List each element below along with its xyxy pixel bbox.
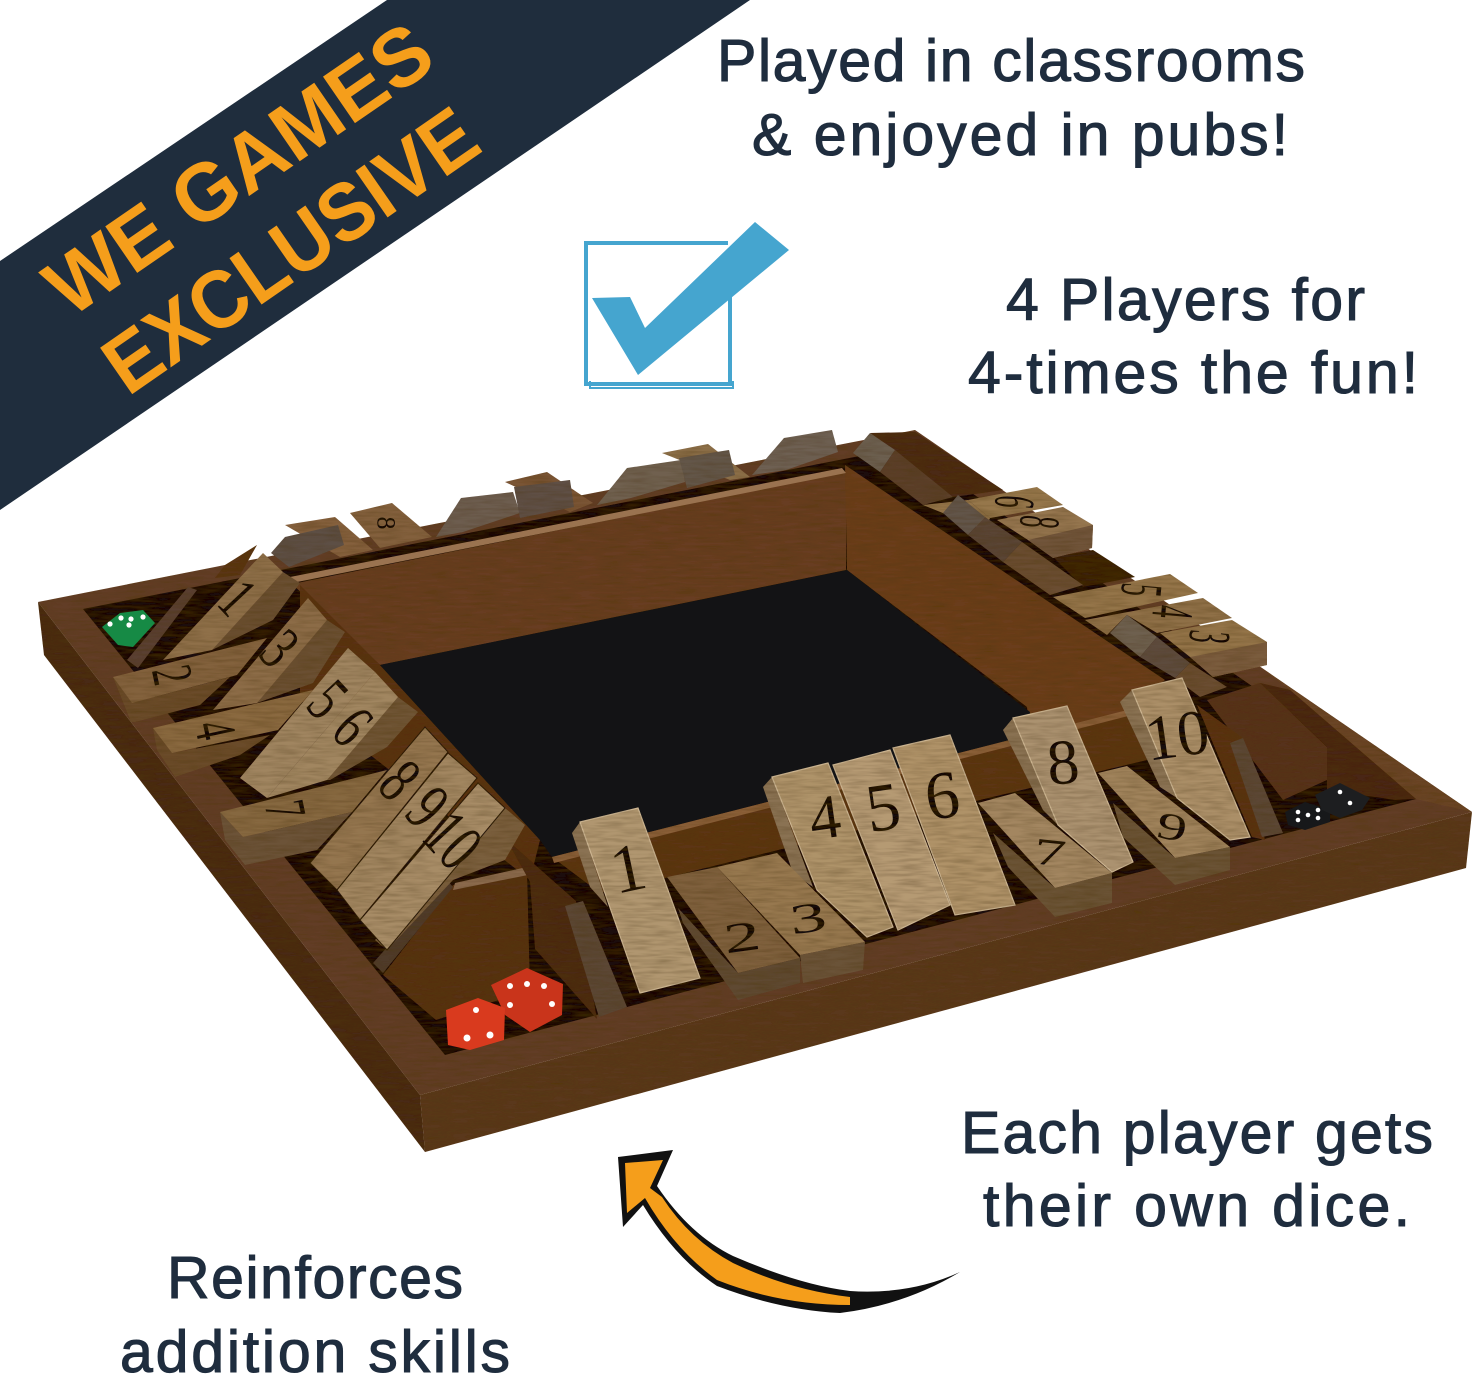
left tile 3: 3: [246, 616, 314, 680]
tray and walls: [38, 430, 1472, 1152]
front tile 3: 3: [787, 893, 829, 943]
game board: wooden shut the box: [38, 430, 1472, 1152]
banner: WE Games Exclusive: EXCLUSIVE: [86, 90, 495, 412]
right row tiles: [853, 432, 1267, 697]
text: played in classrooms: [717, 28, 1305, 168]
text: 4 players: 4-times the fun!: [968, 340, 1418, 406]
front tile 7: [978, 793, 1112, 917]
right row tiles: 4: [1139, 603, 1207, 621]
front tile 4: 4: [805, 782, 845, 854]
board fittings and tiles: [113, 430, 1472, 1020]
left tile 2: 2: [139, 660, 205, 690]
left tile 6: [267, 672, 418, 798]
front tile 9: 9: [1153, 803, 1191, 851]
left tile 10: 10: [409, 796, 497, 884]
left tile 8: [310, 727, 448, 890]
black felt: [380, 570, 1030, 857]
red compartment walls: [383, 840, 597, 1020]
left tile 10: [360, 783, 525, 950]
front tile 6: 6: [920, 755, 964, 835]
front tile 7: 7: [1032, 831, 1068, 875]
dice: red: [446, 968, 563, 1050]
text: 4 players: [968, 267, 1418, 406]
front tile 1: 1: [603, 827, 653, 909]
left tile 3: [213, 598, 345, 710]
front tile 5: 5: [861, 767, 905, 847]
left tile 1: [163, 553, 300, 660]
arrow: curved orange arrow: [618, 1150, 960, 1313]
icon: blue check mark in box: [586, 222, 789, 388]
left tile 1: 1: [205, 567, 269, 629]
front tile 10: 10: [1140, 695, 1214, 775]
right compartment: [1207, 667, 1472, 812]
right row tiles: 3: [1176, 628, 1244, 646]
right row tiles: 6: [982, 493, 1048, 511]
divider flaps: [127, 587, 1283, 1017]
front tile 2: [667, 867, 800, 1000]
left tile 4: [153, 690, 313, 777]
text: reinforces addition skills: [120, 1245, 510, 1378]
front tile 8: [1003, 706, 1133, 872]
front tile 2: 2: [721, 912, 763, 962]
banner: WE Games Exclusive: [0, 0, 750, 510]
back wall top rail highlight: [290, 468, 846, 583]
dice: green: [102, 610, 155, 647]
back row tiles: [271, 430, 838, 567]
text: each player gets dice: Each player gets: [961, 1100, 1433, 1166]
text: played in classrooms: Played in classrooms: [717, 28, 1305, 94]
front tile 4: [763, 763, 893, 937]
text: each player gets dice: [961, 1100, 1433, 1239]
front tile 1: [572, 808, 700, 993]
left tile 5: 5: [293, 667, 361, 733]
left tile 6: 6: [318, 694, 386, 760]
text: each player gets dice: their own dice.: [983, 1173, 1410, 1239]
left tile 9: [337, 753, 477, 920]
front rail: [552, 708, 1147, 893]
text: played in classrooms: & enjoyed in pubs!: [752, 102, 1288, 168]
text: reinforces addition skills: Reinforces: [167, 1245, 463, 1311]
back row tiles: 8: [372, 516, 400, 530]
left tile 2: [113, 638, 267, 722]
front tile 8: 8: [1044, 725, 1082, 799]
right row tiles: 8: [1007, 513, 1073, 531]
text: 4 players: 4 Players for: [1006, 267, 1365, 333]
banner: WE Games Exclusive: WE GAMES: [29, 5, 449, 334]
left tile 5: [240, 648, 375, 798]
left tile 7: 7: [252, 795, 318, 825]
front tile 9: [1098, 766, 1230, 885]
dice: black: [1285, 783, 1370, 830]
front tile 5: [833, 750, 950, 930]
left tile 9: 9: [392, 772, 464, 842]
left tile 7: [220, 770, 387, 865]
right row tiles: 5: [1108, 581, 1176, 599]
front tile 3: [717, 853, 865, 983]
front tile 10: [1120, 678, 1250, 840]
left tile 4: 4: [182, 715, 248, 745]
front tile 6: [893, 735, 1015, 915]
left tile 8: 8: [364, 746, 436, 814]
